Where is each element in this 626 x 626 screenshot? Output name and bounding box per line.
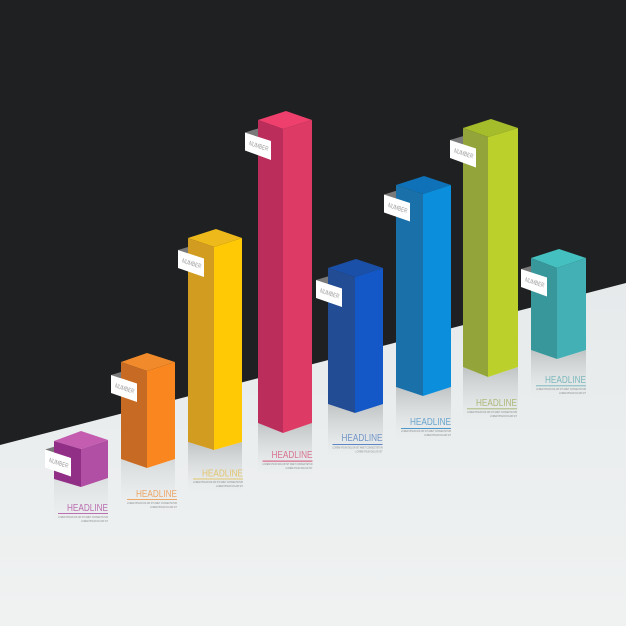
- label: number: [521, 266, 547, 296]
- bar: purple: [45, 431, 108, 525]
- bar: yellow: [178, 229, 243, 495]
- caption: blue: LOREM IPSUM DOLOR SIT: [356, 450, 383, 454]
- caption: green: LOREM IPSUM DOLOR SIT: [490, 414, 517, 418]
- caption: purple: LOREM IPSUM DOLOR SIT AMET CONSECTETUR: [58, 515, 108, 519]
- label: number: [316, 276, 342, 307]
- caption: purple: [58, 503, 108, 523]
- reflection: yellow: [188, 442, 242, 495]
- caption: orange: [127, 489, 177, 509]
- caption: pink: [262, 450, 313, 470]
- caption: teal: HEADLINE: [545, 375, 586, 386]
- reflection: pink: [258, 423, 312, 475]
- caption: teal: LOREM IPSUM DOLOR SIT: [559, 391, 586, 395]
- caption: blue: [332, 433, 383, 454]
- caption: blue: LOREM IPSUM DOLOR SIT AMET CONSECTETUR: [332, 446, 383, 450]
- bar: green: [450, 119, 518, 425]
- caption: green: LOREM IPSUM DOLOR SIT AMET CONSECTETUR: [467, 410, 517, 414]
- caption: pink: HEADLINE: [272, 450, 313, 461]
- bar: teal: [521, 249, 586, 400]
- reflection: purple: [54, 478, 108, 525]
- caption: purple: LOREM IPSUM DOLOR SIT: [81, 519, 108, 523]
- caption: blue: HEADLINE: [342, 433, 383, 444]
- bar: blue: [316, 259, 383, 460]
- caption: pink: LOREM IPSUM DOLOR SIT AMET CONSECTETUR: [262, 462, 313, 466]
- caption: sky blue: [401, 417, 451, 437]
- reflection: orange: [121, 459, 175, 510]
- caption: yellow: LOREM IPSUM DOLOR SIT AMET CONSECTETUR: [193, 480, 243, 484]
- label: number: [245, 128, 271, 160]
- caption: sky blue: LOREM IPSUM DOLOR SIT: [424, 433, 451, 437]
- caption: sky blue: LOREM IPSUM DOLOR SIT AMET CONSECTETUR: [401, 429, 451, 433]
- caption: green: HEADLINE: [476, 398, 517, 409]
- caption: orange: HEADLINE: [136, 489, 177, 500]
- reflection: blue: [328, 404, 383, 460]
- label: number: [111, 372, 137, 402]
- bar: sky blue: [384, 176, 451, 440]
- label: number: NUMBER: [524, 277, 545, 290]
- caption: yellow: HEADLINE: [202, 468, 243, 480]
- label: number: NUMBER: [387, 202, 408, 215]
- caption: orange: LOREM IPSUM DOLOR SIT: [150, 505, 177, 509]
- bar: orange: [111, 353, 177, 510]
- caption: sky blue: HEADLINE: [410, 417, 451, 428]
- caption: orange: LOREM IPSUM DOLOR SIT AMET CONSECTETUR: [127, 501, 177, 505]
- label: number: [384, 191, 410, 222]
- label: number: NUMBER: [114, 383, 135, 396]
- caption: teal: LOREM IPSUM DOLOR SIT AMET CONSECTETUR: [536, 387, 586, 391]
- caption: pink: LOREM IPSUM DOLOR SIT: [286, 466, 313, 470]
- light floor: [0, 283, 626, 626]
- label: number: [450, 136, 476, 168]
- label: number: NUMBER: [48, 457, 69, 470]
- label: number: NUMBER: [248, 140, 269, 153]
- reflection: green: [463, 367, 518, 425]
- caption: green: [467, 398, 517, 418]
- caption: purple: HEADLINE: [67, 503, 108, 514]
- bar: pink: [245, 111, 313, 475]
- reflection: sky blue: [396, 387, 451, 440]
- caption: yellow: [193, 468, 243, 488]
- label: number: NUMBER: [453, 148, 474, 161]
- caption: teal: [536, 375, 586, 395]
- label: number: [178, 247, 204, 277]
- reflection: teal: [531, 350, 586, 400]
- caption: yellow: LOREM IPSUM DOLOR SIT: [216, 484, 243, 488]
- label: number: NUMBER: [181, 258, 202, 271]
- label: number: NUMBER: [319, 288, 340, 301]
